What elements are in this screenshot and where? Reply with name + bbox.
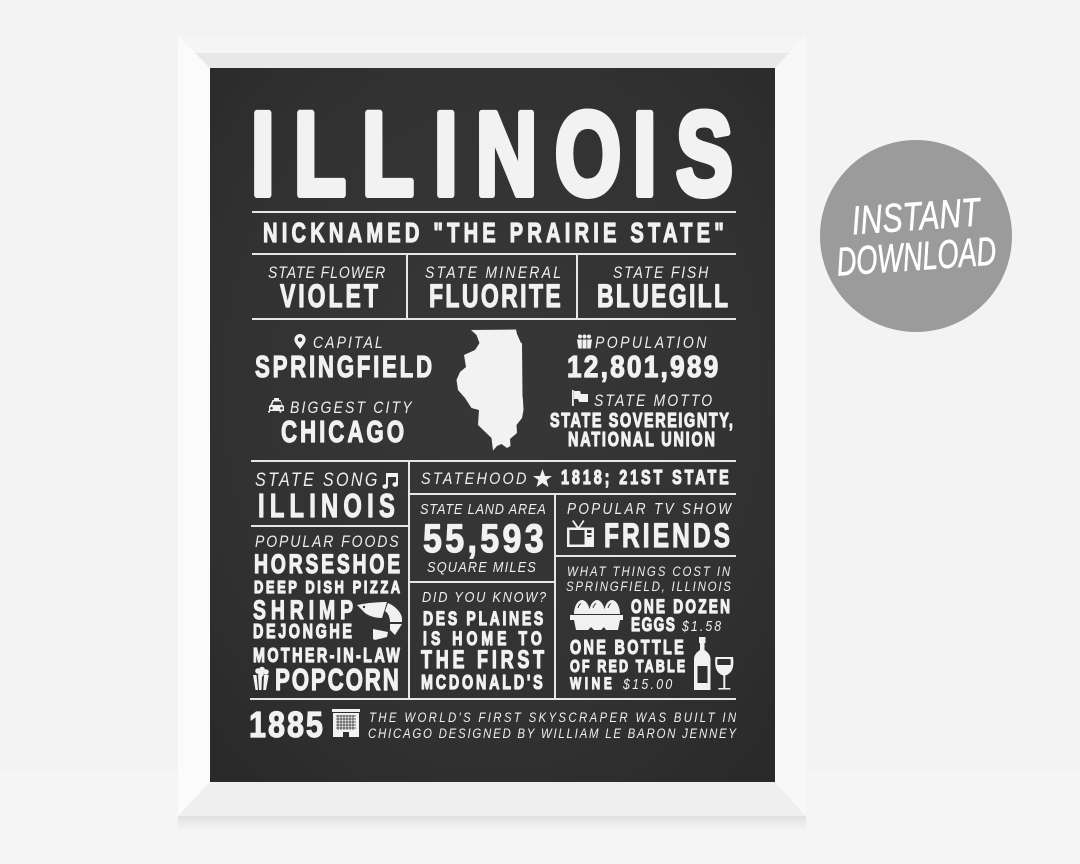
state song bbox=[255, 469, 398, 525]
popular foods: DEEP DISH PIZZA bbox=[254, 578, 400, 598]
did you know: THE FIRST bbox=[421, 645, 545, 674]
popular foods: SHRIMP bbox=[253, 595, 353, 625]
state symbols row bbox=[268, 264, 728, 314]
what things cost: $1.58 bbox=[681, 618, 722, 634]
what things cost: WINE bbox=[570, 675, 612, 694]
skyscraper fact: CHICAGO DESIGNED BY WILLIAM LE BARON JENNEY bbox=[368, 726, 738, 741]
biggest city bbox=[268, 398, 413, 449]
instant download badge bbox=[820, 140, 1012, 332]
what things cost: SPRINGFIELD, ILLINOIS bbox=[566, 579, 731, 594]
capital: SPRINGFIELD bbox=[255, 349, 432, 384]
popular foods bbox=[253, 533, 402, 697]
popular tv show: POPULAR TV SHOW bbox=[567, 501, 733, 518]
biggest city: CHICAGO bbox=[281, 414, 404, 449]
state land area: SQUARE MILES bbox=[427, 558, 536, 575]
capital: CAPITAL bbox=[313, 334, 383, 352]
state flower bbox=[268, 264, 385, 314]
icon: star bbox=[533, 469, 552, 487]
icon: music note bbox=[382, 473, 398, 489]
nickname: NICKNAMED "THE PRAIRIE STATE" bbox=[263, 218, 724, 249]
what things cost: ONE BOTTLE bbox=[570, 636, 684, 659]
did you know bbox=[421, 588, 546, 694]
what things cost: OF RED TABLE bbox=[570, 657, 685, 677]
state fish: BLUEGILL bbox=[597, 278, 728, 314]
popular foods: HORSESHOE bbox=[254, 549, 400, 579]
icon: popcorn bbox=[253, 667, 269, 690]
icon: flag bbox=[572, 390, 588, 406]
state motto: NATIONAL UNION bbox=[568, 428, 715, 451]
state mineral: STATE MINERAL bbox=[425, 264, 561, 282]
icon: wine glass bbox=[715, 657, 733, 690]
did you know: IS HOME TO bbox=[423, 628, 542, 650]
icon: skyscraper building bbox=[332, 709, 360, 737]
skyscraper fact bbox=[249, 706, 738, 746]
state mineral: FLUORITE bbox=[429, 278, 561, 314]
instant download badge: DOWNLOAD bbox=[835, 229, 998, 285]
state fish: STATE FISH bbox=[613, 264, 709, 282]
statehood: 1818; 21ST STATE bbox=[561, 466, 729, 489]
what things cost bbox=[566, 564, 733, 694]
map of Illinois bbox=[456, 330, 524, 450]
population bbox=[567, 334, 718, 385]
what things cost: WHAT THINGS COST IN bbox=[567, 564, 731, 579]
did you know: MCDONALD'S bbox=[421, 671, 543, 694]
instant download badge: INSTANT bbox=[850, 190, 983, 243]
state flower: VIOLET bbox=[280, 278, 378, 314]
state land area: STATE LAND AREA bbox=[420, 500, 546, 517]
what things cost: ONE DOZEN bbox=[631, 596, 730, 618]
what things cost: $15.00 bbox=[622, 676, 673, 692]
population: POPULATION bbox=[595, 334, 707, 352]
icon: shrimp bbox=[357, 602, 402, 640]
state land area bbox=[420, 500, 546, 575]
skyscraper fact: THE WORLD'S FIRST SKYSCRAPER WAS BUILT IN bbox=[369, 710, 737, 725]
capital bbox=[255, 334, 432, 384]
what things cost: EGGS bbox=[631, 614, 675, 636]
skyscraper fact: 1885 bbox=[249, 706, 323, 746]
biggest city: BIGGEST CITY bbox=[290, 399, 413, 417]
popular foods: MOTHER-IN-LAW bbox=[253, 644, 400, 667]
did you know: DES PLAINES bbox=[423, 608, 543, 630]
shelf bbox=[0, 771, 1080, 864]
icon: taxi bbox=[268, 398, 284, 412]
icon: map pin bbox=[294, 334, 306, 349]
icon: wine bottle bbox=[694, 637, 710, 690]
chalkboard poster bbox=[210, 68, 775, 782]
popular foods: DEJONGHE bbox=[253, 620, 352, 643]
icon: television bbox=[567, 520, 594, 547]
white picture frame bbox=[178, 36, 806, 816]
title: ILLINOIS bbox=[251, 88, 733, 220]
state flower: STATE FLOWER bbox=[268, 264, 385, 282]
state motto: STATE MOTTO bbox=[594, 392, 712, 410]
state motto: STATE SOVEREIGNTY, bbox=[550, 409, 733, 432]
icon: people bbox=[577, 334, 592, 348]
statehood: STATEHOOD bbox=[421, 470, 526, 488]
frame shadow bbox=[178, 816, 806, 830]
popular tv show bbox=[567, 501, 733, 555]
state song: ILLINOIS bbox=[258, 488, 395, 525]
state motto bbox=[550, 390, 733, 451]
popular foods: POPULAR FOODS bbox=[255, 533, 399, 551]
state mineral bbox=[425, 264, 561, 314]
state song: STATE SONG bbox=[255, 469, 377, 490]
icon: egg carton bbox=[570, 600, 623, 630]
did you know: DID YOU KNOW? bbox=[422, 588, 546, 605]
popular foods: POPCORN bbox=[275, 662, 399, 697]
state land area: 55,593 bbox=[423, 515, 544, 561]
population: 12,801,989 bbox=[567, 350, 718, 385]
popular tv show: FRIENDS bbox=[604, 517, 730, 555]
statehood bbox=[421, 466, 729, 489]
